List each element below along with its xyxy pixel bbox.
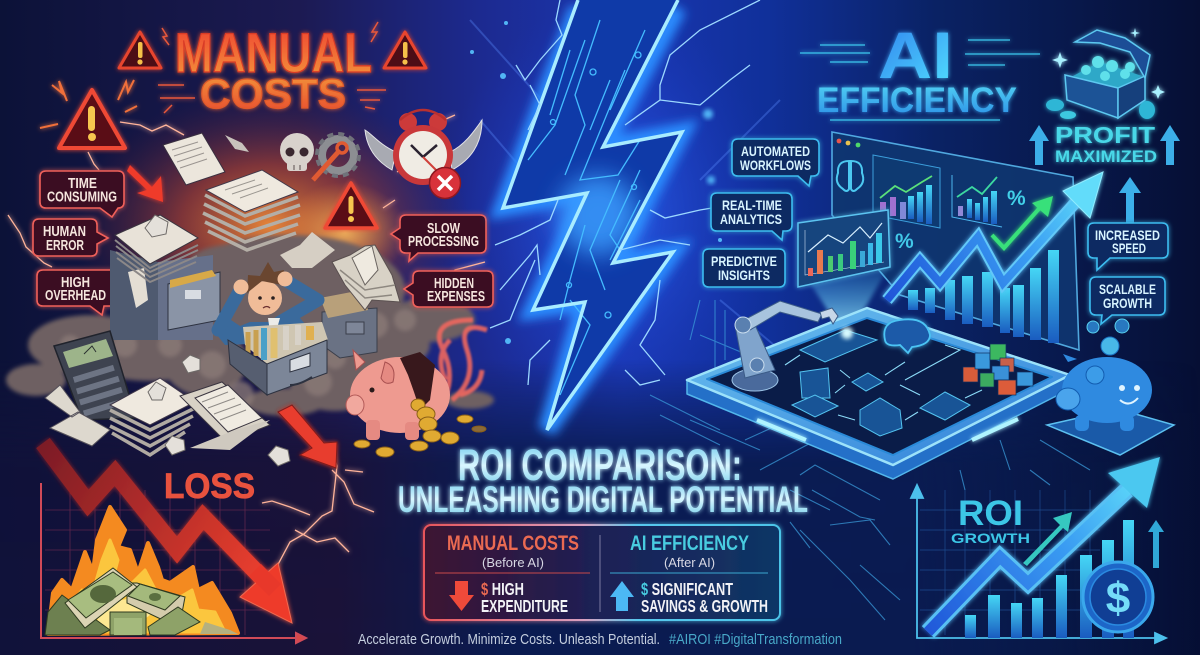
dashboard window [832,132,1079,350]
icon: treasure chest [1046,28,1165,119]
pink flames [438,320,487,410]
paper stacks on desk [45,355,290,466]
label: roi growth: ROI [958,494,1023,533]
big blue roi arrow [928,457,1160,632]
smoke clouds [6,235,494,416]
callout: predictive insights [703,249,785,287]
column: manual costs before ai: (Before AI) [482,555,544,570]
big blue growth arrow [887,172,1103,300]
panel: manual costs side [6,21,494,643]
icon: alarm clock with wings [365,110,482,198]
icon: warning triangle left [119,32,161,68]
floating analytics panel [798,210,890,287]
label: loss: LOSS [164,467,255,506]
label: profit maximized: PROFIT [1055,122,1155,148]
column: manual costs before ai: MANUAL COSTS [447,532,579,555]
icon: large warning triangle [40,80,137,148]
column: ai efficiency after ai: $ SIGNIFICANT [641,579,733,599]
central title: UNLEASHING DIGITAL POTENTIAL [398,478,808,520]
icon: blue piggy bank [1047,319,1174,455]
green trend arrow [992,196,1053,248]
small up arrow [1148,520,1164,568]
callout: human error: HUMAN [43,224,86,240]
callout: automated workflows: WORKFLOWS [740,157,811,173]
column: ai efficiency after ai: (After AI) [664,555,715,570]
footer tagline: Accelerate Growth. Minimize Costs. Unleash Potential. [358,631,660,648]
icon: dollar coin [1083,562,1153,632]
icon: flying paper [163,133,249,185]
hologram beam [808,268,888,340]
label: profit maximized: MAXIMIZED [1055,148,1157,166]
central title [398,441,808,520]
callout: slow processing [391,215,486,261]
footer tagline: #AIROI #DigitalTransformation [669,631,842,648]
flow arrows [785,345,982,420]
callout: time consuming [40,171,124,217]
column: manual costs before ai [435,532,590,616]
callout: high overhead [37,270,125,315]
red arrow to filing cabinet [127,165,163,202]
up arrows beside profit [1029,125,1180,165]
sparkle particles [470,21,722,344]
callout: human error: ERROR [46,238,84,254]
lightning branches [490,0,760,385]
icon: warning triangle right [384,32,426,68]
column: ai efficiency after ai [610,532,768,616]
chart bars [965,520,1134,638]
callout: high overhead: OVERHEAD [45,288,106,304]
callout: automated workflows: AUTOMATED [741,143,810,159]
workflow nodes [792,330,970,436]
label: roi growth [951,494,1030,546]
icon: calculator [54,331,136,420]
brain node [884,319,930,353]
mini chart 2 [952,175,1002,227]
chart grid [45,490,270,635]
circuit traces [528,20,645,395]
robotic arm [732,301,838,391]
callout: hidden expenses: EXPENSES [427,289,485,305]
title: ai efficiency: EFFICIENCY [817,81,1017,120]
callout: slow processing: SLOW [427,221,460,237]
title: manual costs [158,21,386,117]
callout: scalable growth: GROWTH [1103,295,1152,311]
central lightning bolt [503,0,682,430]
tall paper stack [203,170,300,250]
percent symbol: % [1007,187,1026,210]
right cabinet with papers [320,245,400,358]
title: ai efficiency: AI [878,18,953,92]
small teal arrow [1023,512,1072,566]
open file drawer [228,322,328,395]
loss chart [41,443,306,643]
title: ai efficiency [800,18,1040,120]
bars behind growth arrow [908,250,1059,343]
icon: dollar coin: $ [1106,574,1130,623]
column: manual costs before ai: $ HIGH [481,579,524,599]
lightning crackles red [8,115,485,600]
label: roi growth: GROWTH [951,530,1030,546]
chart axes [911,485,1166,643]
roi growth chart [911,457,1166,643]
color cubes [963,344,1033,395]
callout: predictive insights: INSIGHTS [718,267,770,283]
callout: increased speed: SPEED [1112,240,1146,256]
worried man [217,262,318,345]
big red loss arrow [43,443,292,623]
chart grid [920,490,1100,635]
icon: gear and wrench [313,134,359,180]
column: ai efficiency after ai: SAVINGS & GROWTH [641,596,768,616]
callout: real-time analytics: ANALYTICS [720,211,782,227]
callout: scalable growth [1090,277,1165,324]
circuit lines under platform [650,300,1090,620]
icon: skull [280,133,314,171]
isometric ai platform [687,308,1070,479]
callout: slow processing: PROCESSING [408,234,479,250]
comparison box [424,525,780,620]
callout: scalable growth: SCALABLE [1099,281,1156,297]
column: manual costs before ai: EXPENDITURE [481,596,568,616]
hologram spark [841,327,853,339]
callout: time consuming: CONSUMING [47,190,117,206]
mini chart 1 [873,155,940,228]
callout: real-time analytics: REAL-TIME [722,197,782,213]
title: manual costs: COSTS [200,70,346,117]
callout: hidden expenses [404,271,493,307]
label: profit maximized [1055,122,1157,166]
chart axes [41,483,306,643]
icon: brain outline [837,161,863,191]
callout: real-time analytics [711,193,792,240]
gold coins [354,399,486,457]
callout: hidden expenses: HIDDEN [434,276,474,292]
callout: time consuming: TIME [68,176,97,192]
percent symbol: % [895,230,914,253]
central title: ROI COMPARISON: [458,441,742,490]
up arrow [1119,177,1141,225]
callout: automated workflows [732,139,819,186]
title: manual costs: MANUAL [175,21,372,84]
callout: increased speed: INCREASED [1095,227,1160,243]
column: ai efficiency after ai: AI EFFICIENCY [630,532,749,555]
icon: warning triangle center [325,183,377,228]
callout: increased speed [1088,223,1168,270]
callout: high overhead: HIGH [61,275,90,291]
panel: ai efficiency side [358,18,1180,648]
callout: predictive insights: PREDICTIVE [711,253,777,269]
flying envelope paper [280,232,335,268]
icon: broken piggy bank [346,350,450,440]
flames [48,507,238,634]
red arrow to loss [278,405,337,468]
money pile [45,568,238,635]
callout: human error [33,219,108,256]
filing cabinet with paper stack [110,215,220,340]
